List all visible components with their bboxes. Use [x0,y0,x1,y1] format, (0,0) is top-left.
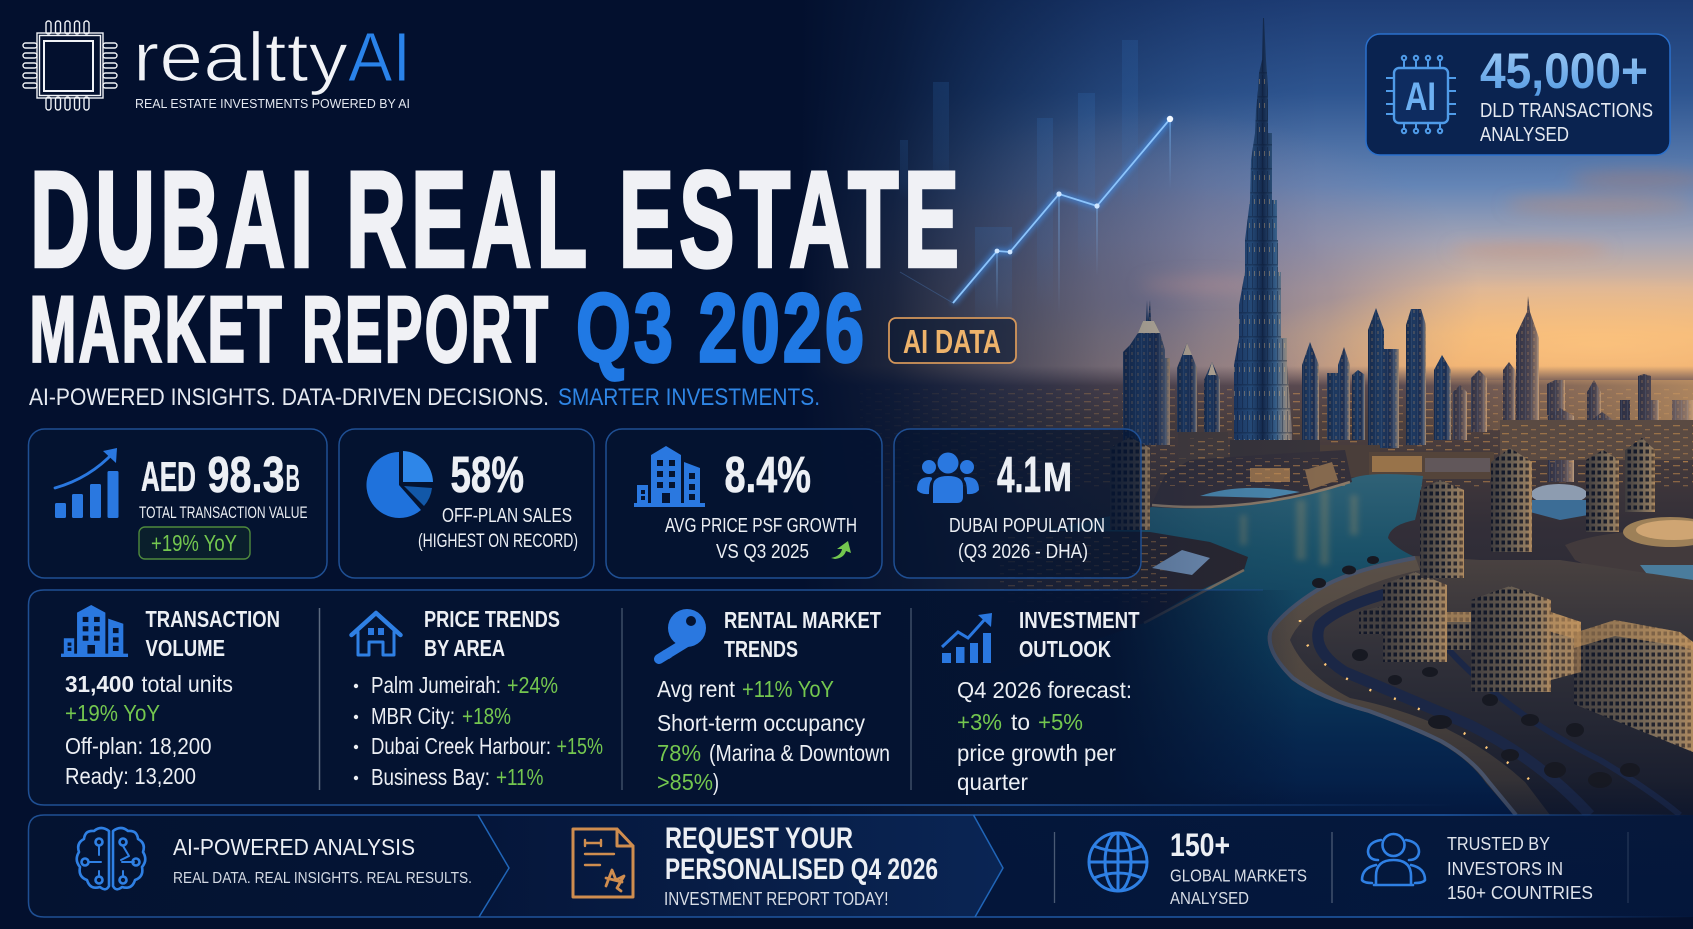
label line 1: AVG PRICE PSF GROWTH [665,515,857,537]
subtitle: SMARTER INVESTMENTS. [558,384,820,411]
list of areas: +24% [507,672,558,698]
panel: total transaction value [28,429,327,578]
foreground land [1268,556,1693,815]
list of areas: Palm Jumeirah: [371,672,501,698]
stat: 45,000+ [1480,43,1648,99]
panel: bottom call-to-action bar [28,815,1693,917]
label [1480,100,1653,146]
list of areas: Dubai Creek Harbour: [371,733,551,759]
title quarter: Q3 2026 [576,274,867,382]
back towers [1453,296,1693,482]
body text: +11% YoY [742,676,834,702]
body text: Q4 2026 forecast: [957,677,1132,703]
title [30,144,964,382]
left peninsula [980,530,1248,680]
body text [65,671,233,789]
section: global markets [1089,827,1307,908]
panel: off-plan sales [339,429,594,578]
icon: microchip [23,21,117,110]
icon: AI chip: AI [1405,75,1436,119]
list of areas: MBR City: [371,703,455,729]
Burj Khalifa [1234,18,1292,460]
panel: average price growth [606,429,882,578]
downtown island [1152,450,1352,507]
icon: house [352,613,400,655]
rising chart line with nodes [900,116,1173,314]
body text [657,676,890,795]
list of areas: Business Bay: [371,764,490,790]
badge: AI DATA [889,318,1016,363]
body text: >85% [657,769,713,795]
body text: ) [713,769,719,795]
icon: green up arrow [831,541,851,559]
icon: growth chart [942,613,992,663]
icon: people outline [1362,834,1425,885]
heading: VOLUME [146,635,225,661]
body text: +3% [957,709,1002,735]
wordmark accent: AI [348,18,411,96]
promenade [1268,556,1550,815]
icon: people group [917,452,979,503]
panel: Dubai population [894,429,1141,578]
subtext: INVESTMENT REPORT TODAY! [664,889,888,909]
icon: key [656,609,706,660]
body text: +5% [1038,709,1083,735]
title line 2: MARKET REPORT [30,276,550,382]
stat: 4.1M: M [1043,454,1072,500]
body text: Short-term occupancy [657,710,865,736]
label: DLD TRANSACTIONS [1480,100,1653,122]
icon: document with seal [573,829,633,897]
list of areas: +15% [556,733,603,759]
dome and stadium [1530,484,1693,590]
label line 1: OFF-PLAN SALES [442,505,572,527]
wordmark: realtty [133,18,348,96]
growth badge: +19% YoY [151,530,237,556]
icon: rising bar chart [55,448,118,518]
logo: realttyAI [23,18,411,111]
body text: Off-plan: 18,200 [65,733,212,759]
label line 2: (HIGHEST ON RECORD) [418,531,578,552]
heading: OUTLOOK [1019,636,1111,662]
text: INVESTORS IN [1447,859,1563,879]
tagline: REAL ESTATE INVESTMENTS POWERED BY AI [135,96,410,111]
heading [1019,607,1140,662]
heading [424,606,560,661]
section: request report [573,822,938,909]
badge: AI DATA: AI DATA [903,323,1001,360]
middle arrow segment [478,815,1003,917]
subtext: REAL DATA. REAL INSIGHTS. REAL RESULTS. [173,870,472,887]
body text: (Marina & Downtown [709,740,890,766]
label line 1: DUBAI POPULATION [949,515,1105,537]
heading: TRANSACTION [146,606,280,632]
heading: REQUEST YOUR [665,822,853,855]
mid-ground buildings [1178,420,1693,480]
heading: AI-POWERED ANALYSIS [173,834,415,860]
heading [146,606,280,661]
body text: quarter [957,769,1028,795]
subtitle: AI-POWERED INSIGHTS. DATA-DRIVEN DECISIONS. [29,384,549,411]
icon: buildings [634,446,705,507]
text: 150+ COUNTRIES [1447,883,1593,903]
ground plane [0,366,1693,929]
body text: price growth per [957,740,1116,766]
body text [957,677,1132,795]
coastal road [1318,590,1590,815]
label line 2: (Q3 2026 - DHA) [958,541,1088,563]
list of areas: +11% [496,764,544,790]
section: request report: PERSONALISED Q4 2026 [665,853,938,886]
section: AI-powered analysis [77,828,472,889]
stat: 150+: 150+ [1170,827,1230,863]
body text: to [1011,709,1030,735]
body text: 31,400 [65,671,134,697]
text: TRUSTED BY [1447,834,1550,854]
growth badge [139,527,250,559]
body text: 78% [657,740,701,766]
icon: AI chip [1386,56,1456,133]
badge: 45,000+ DLD transactions analysed [1366,34,1670,155]
stat: 4.1M: 4.1 [997,446,1041,503]
stat: AED 98.3B: 98.3 [208,446,284,503]
body text: total units [142,671,233,697]
icon: buildings [61,605,128,657]
stat: AED 98.3B: AED [141,453,196,500]
list of areas: +18% [462,703,511,729]
section: rental market trends [656,607,890,795]
icon: pie chart [366,451,433,518]
faint background chart towers [900,40,1138,327]
label: GLOBAL MARKETS [1170,866,1307,886]
icon: brain circuit [77,828,145,889]
body text: Avg rent [657,676,736,702]
section: trusted by investors [1362,834,1593,903]
heading: INVESTMENT [1019,607,1140,633]
body text: +19% YoY [65,700,160,726]
stat: AED 98.3B [141,446,300,503]
title line 1: DUBAI REAL ESTATE [30,144,964,296]
stat: AED 98.3B: B [286,458,300,500]
icon: globe [1089,833,1147,891]
text [1447,834,1593,903]
stat: 58%: 58% [450,446,524,503]
water channel [1000,474,1514,815]
body text: Ready: 13,200 [65,763,196,789]
panel: market details [28,590,1456,805]
stat: 8.4%: 8.4% [724,446,811,503]
front towers and residential blocks [1110,437,1693,752]
label: TOTAL TRANSACTION VALUE [139,503,308,522]
section: investment outlook [942,607,1140,795]
water reflections [1240,490,1358,565]
section: global markets: ANALYSED [1170,888,1249,908]
heading: PRICE TRENDS [424,606,560,632]
list of areas [354,672,603,790]
palms and trees [1312,556,1640,788]
heading [724,607,881,662]
heading: BY AREA [424,635,505,661]
heading: RENTAL MARKET [724,607,881,633]
label line 2: VS Q3 2025 [716,541,809,563]
section: price trends by area [352,606,603,790]
heading: TRENDS [724,636,798,662]
label: ANALYSED [1480,124,1569,146]
section: transaction volume [61,605,280,789]
